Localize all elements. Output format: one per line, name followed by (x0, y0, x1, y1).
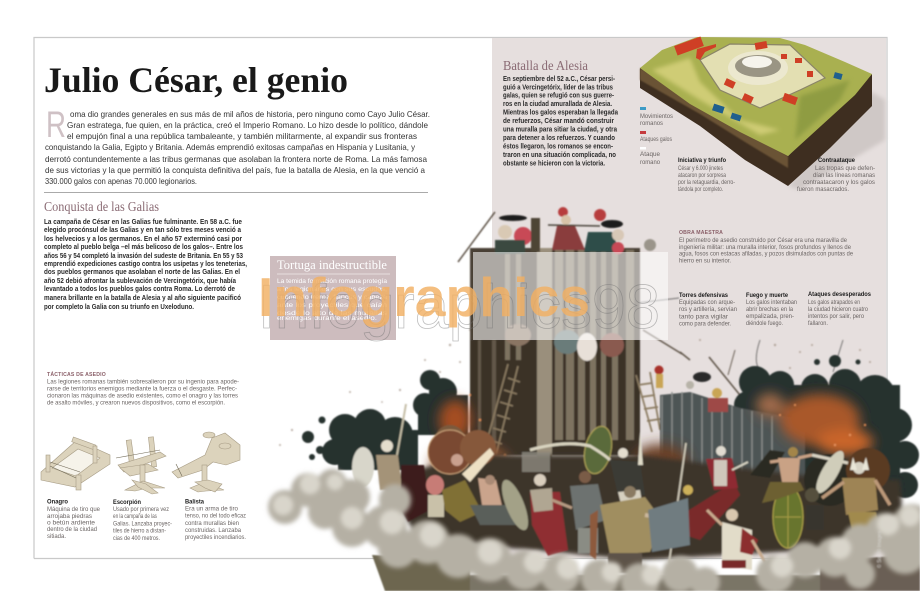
text: Conquista de las Galias: emprendió expediciones castigo contra los usípetas y los teneterias, (44, 260, 247, 268)
text: Conquista de las Galias (44, 218, 247, 311)
palisade wall (654, 366, 805, 490)
text: Conquista de las Galias: por completo la Galia con su triunfo en Uxeloduno. (44, 303, 194, 311)
text: Ataques desesperados (808, 291, 871, 327)
text: Batalla de Alesia: para detener a los refuerzos. Y cuando (503, 134, 616, 142)
terrain shadow (788, 92, 885, 190)
legend: ataques galos: Ataques galos (640, 137, 672, 143)
text: Balista: Balista (185, 498, 204, 506)
text: Balista: contra murallas bien (185, 521, 239, 527)
text: Onagro: Onagro (47, 498, 68, 506)
terrain surface (640, 37, 872, 156)
text: Torres defensivas: Torres defensivas (679, 292, 728, 299)
legend: movimientos romanos: Movimientos (640, 114, 673, 120)
text: Fuego y muerte: Fuego y muerte (746, 292, 788, 299)
text: Batalla de Alesia: guió a Vercingetórix, líder de las tribus (503, 84, 613, 92)
text: Fuego y muerte: diéndole fuego. (746, 321, 783, 327)
text: Escorpión: en la campaña de las (113, 514, 157, 520)
text: Ataques desesperados: intentos por salir, pero (808, 314, 865, 320)
text: Contraataque: fueron masacrados. (797, 187, 849, 193)
text: Iniciativa y triunfo (678, 157, 735, 193)
text: Onagro: sitiada. (47, 534, 66, 540)
intro text block: conquistando la Galia, Egipto y Britania. Además emprendió exitosas campañas en Hispania y Lusitania, y (45, 143, 416, 152)
text: Batalla de Alesia: traron en una situación complicada, no (503, 151, 617, 159)
text: Fuego y muerte (746, 292, 797, 327)
text: Escorpión: Usado por primera vez (113, 507, 169, 513)
text: Batalla de Alesia: éstos llegaron, los romanos se encon- (503, 142, 614, 150)
text: Contraataque: contraatacaron y los galos (803, 180, 875, 186)
text: Conquista de las Galias: completo al pueblo belga –el más belicoso de los galos–. Entre los (44, 243, 243, 251)
text: Batalla de Alesia: galas, quien se refugió con sus guerre- (503, 92, 615, 100)
panel: Tortuga indestructible (270, 256, 396, 340)
combatant: central Gallic warrior (590, 486, 675, 573)
text: Conquista de las Galias: años 56 y 54 completó la invasión del sudeste de Britania. En 55 y 53 (44, 252, 243, 260)
combatant: armoured legionary (522, 424, 616, 553)
combatant: winged helmet warrior (805, 447, 890, 530)
text: Obra maestra: OBRA MAESTRA (679, 230, 723, 236)
text: Tácticas de asedio: rarse de territorios enemigos mediante la fuerza o el desgaste. Perfec- (47, 386, 237, 392)
panel: Tortuga indestructible: enemigas durante el asedio. (277, 315, 377, 322)
text: Ataques desesperados: fallaron. (808, 321, 828, 327)
panel: Tortuga indestructible: a los legionarios con sus escudos, (277, 286, 387, 293)
map: terrain block of Alesia (640, 37, 885, 190)
text: Conquista de las Galias: La campaña de César en las Galias fue fulminante. En 58 a.C. fue (44, 218, 242, 226)
text: Obra maestra: agua, fosos con estacas afiladas, y pozos disimulados con puntas de (679, 252, 854, 258)
intro text block: 330.000 galos con apenas 70.000 legionarios. (45, 177, 197, 186)
text: Onagro: Máquina de tiro que (47, 507, 101, 513)
intro text block: Gran estratega, fue quien, en la práctica, creó el Imperio Romano. Lo hizo desde lo político, dándole (67, 121, 428, 130)
text: Conquista de las Galias: los helvecios y a los germanos. En el año 57 exterminó casi por (44, 235, 242, 243)
legend: movimientos romanos (640, 107, 673, 127)
text: Torres defensivas: Equipadas con arque- (679, 300, 735, 306)
text: Escorpión: cias de 400 metros. (113, 536, 160, 542)
text: Torres defensivas (679, 292, 737, 328)
text: Conquista de las Galias: año 52 debió afrontar la sublevación de Vercingetórix, que había (44, 277, 236, 285)
text: Escorpión: tiles de hierro a distan- (113, 528, 166, 534)
text: Fuego y muerte: abrir brechas en la (746, 307, 794, 313)
text: Iniciativa y triunfo: César y 6.000 jinetes (678, 166, 723, 172)
text: Batalla de Alesia: Mientras los galos esperaban la llegada (503, 108, 618, 116)
text: Contraataque (797, 157, 875, 193)
text: Balista: proyectiles incendiarios. (185, 535, 246, 541)
text: Iniciativa y triunfo: Iniciativa y triunfo (678, 157, 726, 164)
text: Iniciativa y triunfo: por la retaguardia, derro- (678, 180, 735, 186)
combatant: roman with red shield (648, 482, 765, 570)
combatant: gladiator spear (669, 443, 686, 563)
callout lines (620, 298, 843, 372)
smoke cloud foreground (268, 469, 920, 591)
text: Escorpión: Escorpión (113, 499, 141, 506)
icon: escorpión (116, 437, 166, 494)
text: Contraataque: dían las líneas romanas (813, 173, 875, 179)
text: Batalla de Alesia: obstante se hicieron con la victoria. (503, 160, 605, 168)
ladders (484, 364, 660, 455)
heading: Batalla de Alesia: Batalla de Alesia (503, 58, 588, 73)
round shields (428, 425, 890, 506)
text: Onagro: dentro de la ciudad (47, 527, 97, 533)
text: Escorpión (113, 499, 172, 542)
panel: Tortuga indestructible: ante los proyectiles que caían (277, 302, 388, 309)
debris specks (279, 329, 871, 446)
text: Conquista de las Galias: manera brillante en la batalla de Alesia y al año siguiente pacificó (44, 294, 242, 302)
combatant: gallic warrior left (352, 404, 430, 522)
title: Julio César, el genio (44, 60, 348, 100)
combatants (352, 404, 890, 573)
red and blue troop markers (674, 37, 813, 105)
text: Contraataque: Las tropas que defen- (815, 166, 875, 172)
text: Conquista de las Galias: levantado a todos los pueblos galos contra Roma. Lo derrotó de (44, 285, 235, 293)
text: Tácticas de asedio: de asalto móviles, y crearon nuevos dispositivos, como el escorpión. (47, 400, 225, 406)
text: Balista: Era un arma de tiro (185, 506, 239, 512)
text: Onagro: o betún ardiente (47, 520, 96, 526)
intro text block (45, 104, 430, 186)
panel: Tortuga indestructible: Tortuga indestructible (277, 257, 387, 272)
text: Obra maestra: ingeniería militar: una muralla interior, fosos profundos y llenos de (679, 245, 852, 251)
text: Balista: construidas. Lanzaba (185, 528, 242, 534)
combatant: red cloaked roman (497, 474, 572, 556)
legend (640, 107, 673, 166)
text: Torres defensivas: como para defender. (679, 322, 731, 328)
combatant: roman kneeling (706, 446, 748, 490)
text: Balista: tenso, no del todo eficaz (185, 514, 246, 520)
intro text block: el empujón final a una república tambaleante, y también militarmente, al expandir sus fronteras (67, 132, 417, 141)
heading: Conquista de las Galias: Conquista de las Galias (44, 199, 159, 214)
text: Torres defensivas: ros y artillería, servían (679, 307, 737, 313)
panel: Tortuga indestructible: cubriendo frente, flancos y cabeza (277, 294, 387, 301)
watermark text: Infographics (258, 266, 590, 328)
legend: ataque romano: Ataque (640, 152, 661, 158)
text: Tácticas de asedio (47, 371, 239, 406)
text: Ataques desesperados: Ataques desesperados (808, 291, 871, 298)
intro text block: oma dio grandes generales en sus más de mil años de historia, pero ninguno como Cayo Julio César. (70, 110, 430, 119)
panel: Tortuga indestructible: La temida formación romana protegía (277, 278, 387, 285)
text: Tácticas de asedio: TÁCTICAS DE ASEDIO (47, 371, 106, 378)
watermark text: Infographics98 (258, 273, 660, 342)
text: Onagro (47, 498, 101, 540)
text: Balista (185, 498, 246, 541)
text: Tácticas de asedio: Las legiones romanas también sobresalieron por su ingenio para apode- (47, 380, 239, 386)
foliage at bottom (372, 555, 920, 591)
text: Conquista de las Galias: dos pueblos germanos que asolaban el norte de las Galias. En el (44, 268, 240, 276)
spears (458, 212, 770, 432)
battle illustration (268, 207, 920, 591)
text: Iniciativa y triunfo: atacaron por sorpresa (678, 173, 727, 179)
legend: ataque romano: romano (640, 160, 661, 166)
combatant: bare chested Gaul (750, 447, 848, 548)
text: Onagro: arrojaba piedras (47, 514, 92, 520)
text: Batalla de Alesia: de refuerzos, César mandó construir (503, 117, 614, 125)
text: Batalla de Alesia: ros en la ciudad amurallada de Alesia. (503, 100, 612, 108)
terrain soil sides (640, 68, 872, 186)
icon: balista (172, 432, 240, 492)
text: Tácticas de asedio: cionaron las máquinas de asedio existentes, como el onagro y las torres (47, 394, 238, 400)
text: Contraataque: Contraataque (818, 157, 855, 164)
dark smoke clouds (302, 355, 919, 498)
text: Fuego y muerte: Los galos intentaban (746, 300, 797, 306)
soldiers atop the tower (495, 207, 656, 254)
text: Batalla de Alesia: una muralla para sitiar la ciudad, y otra (503, 126, 617, 134)
text: Fuego y muerte: empalizada, pren- (746, 314, 794, 320)
soldiers behind the tower wash (505, 324, 624, 361)
text: Ataques desesperados: Los galos atrapados en (808, 300, 860, 306)
text: Obra maestra (679, 230, 854, 264)
panel: Batalla de Alesia background (492, 38, 886, 558)
combatant: roman with red plume (426, 448, 520, 525)
drop cap: R (46, 104, 66, 145)
credit: © Sol 90 Images (876, 530, 883, 568)
icon: onagro (41, 437, 110, 490)
text: Torres defensivas: tanto para vigilar (679, 314, 728, 320)
legend: movimientos romanos: romanos (640, 121, 663, 127)
text: Conquista de las Galias: elegido procónsul de las Galias y en tan sólo tres meses venció a (44, 226, 241, 234)
text: Escorpión: Galias. Lanzaba proyec- (113, 522, 172, 528)
legend: ataque romano (640, 147, 661, 166)
watermark: pale tint over tower (473, 252, 668, 340)
text: Batalla de Alesia (503, 75, 618, 168)
dark ground behind combatants (380, 455, 905, 560)
text: Iniciativa y triunfo: tándola por completo. (678, 187, 723, 193)
text: Obra maestra: hierro en su interior. (679, 258, 731, 264)
intro text block: derrotó contundentemente a las tribus germanas que asolaban la frontera norte de Roma. La más famosa (45, 155, 427, 164)
fire and embers (430, 393, 873, 487)
combatant: dark armoured warrior (610, 432, 645, 520)
text: Batalla de Alesia: En septiembre del 52 a.C., César persi- (503, 75, 616, 83)
intro text block: de sus victorias y la que permitió la conquista definitiva del país, fue la batalla de Alesia, en la que venció a (45, 166, 425, 175)
text: Ataques desesperados: la ciudad hicieron cuatro (808, 307, 869, 313)
panel: Tortuga indestructible: desde lo alto de las murallas (277, 310, 387, 317)
tower of the palisade (470, 248, 660, 458)
text: Obra maestra: El perímetro de asedio construido por César era una maravilla de (679, 238, 848, 244)
